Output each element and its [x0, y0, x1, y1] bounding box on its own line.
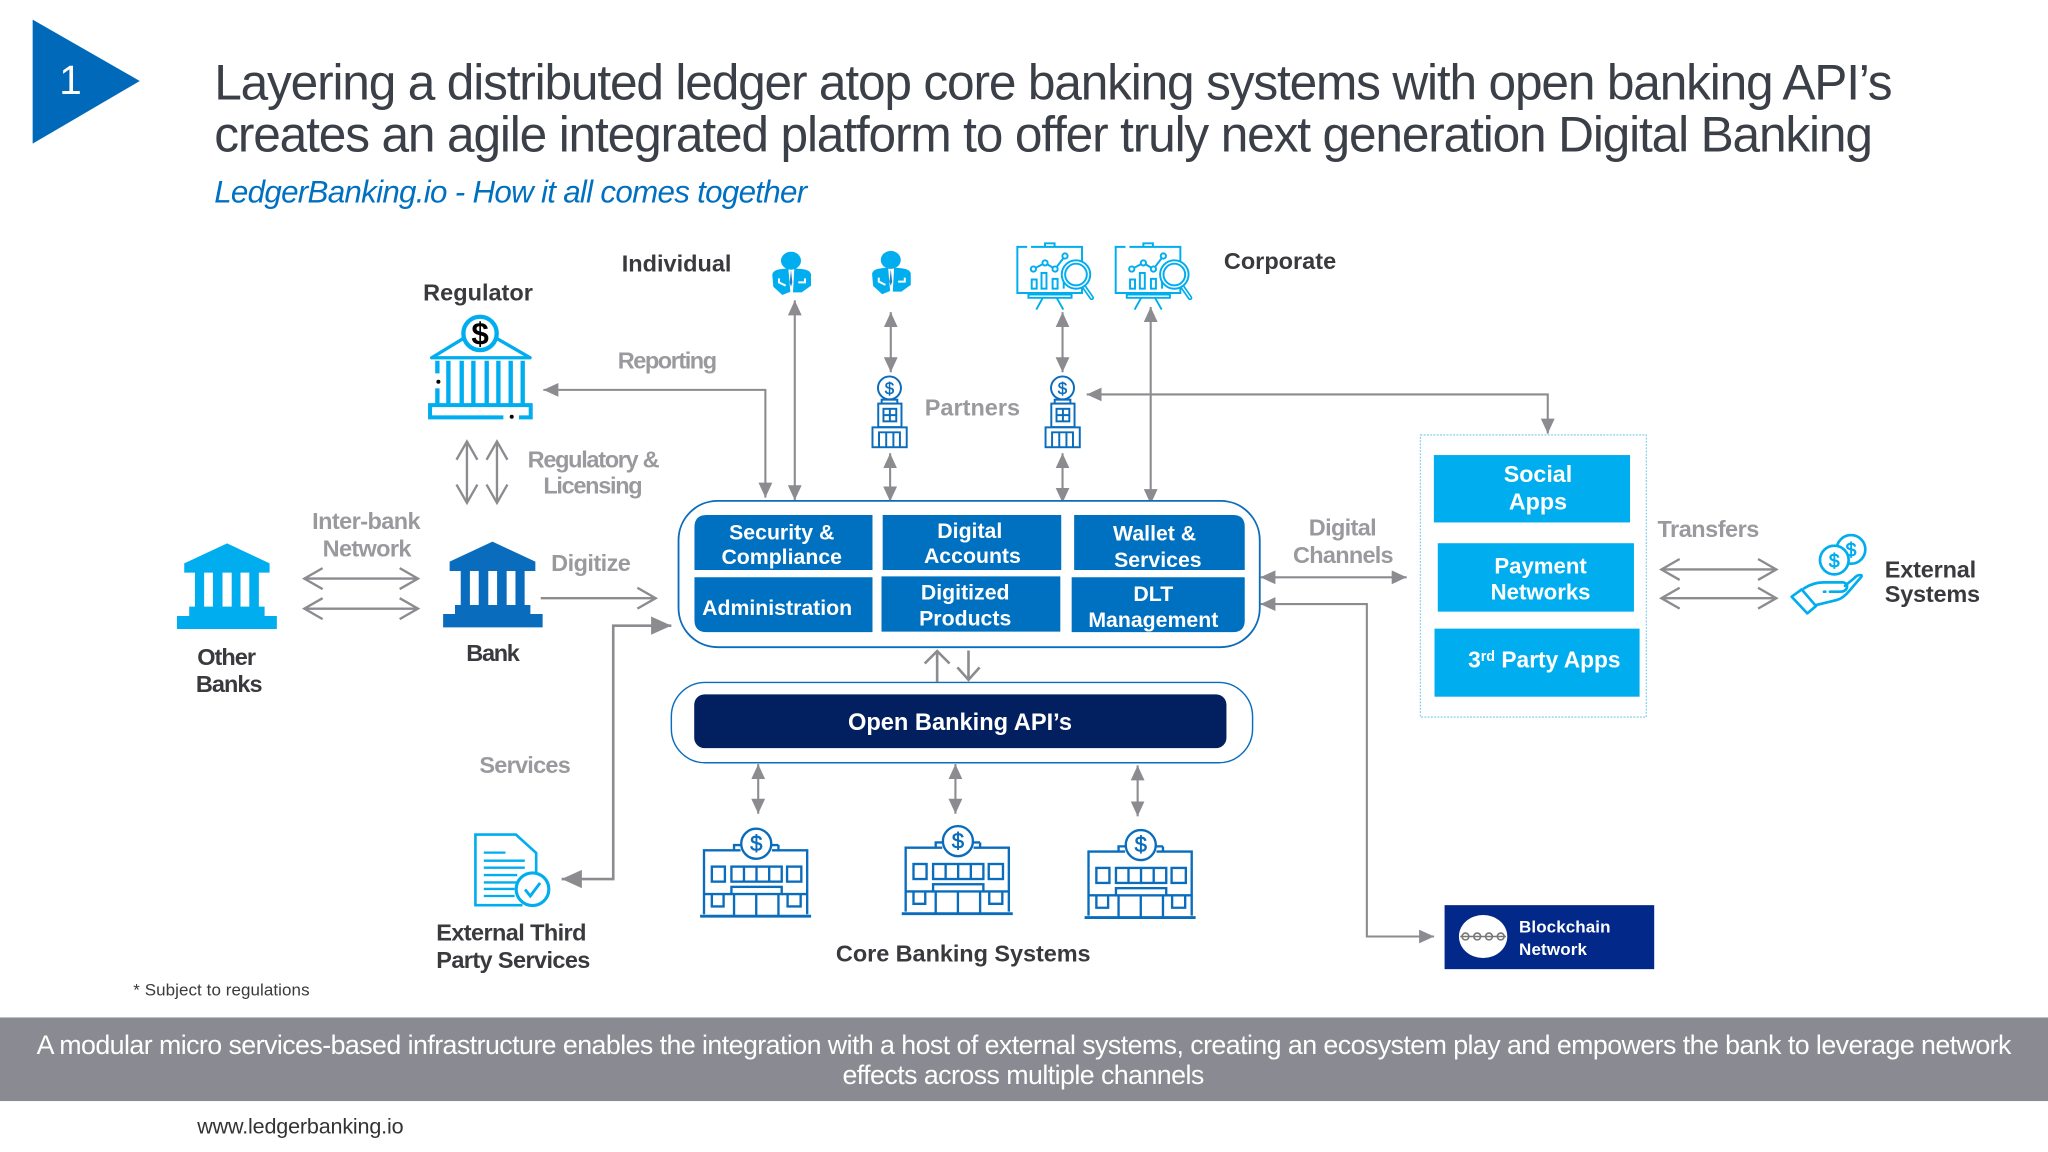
icon: corporate dashboard 2 [1116, 243, 1190, 310]
box: blockchain network: Blockchain [1519, 918, 1610, 937]
arrow: reporting [543, 390, 765, 498]
section number triangle [33, 20, 140, 144]
panel: open banking APIs: Open Banking API’s [848, 710, 1072, 736]
box: payment networks: Networks [1491, 580, 1591, 605]
box: blockchain network: Network [1519, 940, 1588, 959]
box: third party apps: Party Apps [1495, 646, 1621, 672]
label: inter-bank network: Inter-bank [312, 508, 421, 534]
panel: ledgerbanking platform [679, 501, 1260, 647]
icon: regulator building: $ [471, 317, 489, 352]
icon: partner bank 1 [872, 376, 907, 447]
cell: dlt management: DLT [1133, 582, 1173, 606]
arrow: digital channels [1260, 576, 1407, 578]
box: payment networks [1438, 543, 1634, 612]
cell: digitized products: Digitized [921, 581, 1010, 605]
label: external third party services: External Third [436, 919, 586, 945]
box: payment networks: Payment [1494, 553, 1587, 578]
label: external third party services: Party Services [436, 947, 590, 973]
icon: external systems hand with coins: $ [1846, 541, 1857, 562]
icon: core bank 2 [902, 826, 1013, 914]
box: third party apps: rd [1481, 649, 1495, 665]
subtitle: LedgerBanking.io - How it all comes together [214, 174, 809, 209]
box: blockchain network [1445, 905, 1654, 969]
cell: digitized products: Products [919, 607, 1011, 631]
arrows: platform to open banking [925, 650, 980, 682]
box: social apps: Apps [1509, 488, 1567, 514]
cell: wallet and services [1074, 515, 1245, 572]
arrow: core system 3 [1137, 765, 1139, 816]
arrow: services [562, 626, 671, 879]
icon: core bank 1 [700, 829, 811, 916]
arrow: corporate to partner [1062, 312, 1064, 372]
cell: administration [694, 577, 872, 632]
cell: digital accounts: Digital [937, 519, 1002, 543]
cell: security and compliance: Security & [729, 520, 834, 544]
arrow: partner to platform left [889, 453, 891, 502]
icon: individual customer 2 [872, 251, 911, 294]
label: individual: Individual [622, 251, 731, 277]
arrow: individual to partner [890, 312, 892, 372]
cell: digitized products [882, 576, 1060, 632]
label: other banks: Other [197, 644, 256, 670]
arrow: core system 2 [954, 764, 956, 814]
arrow: core system 1 [757, 764, 759, 814]
cell: digital accounts [883, 515, 1061, 570]
panel: external channels [1420, 435, 1646, 717]
label: external systems: Systems [1885, 581, 1980, 607]
icon: bank [443, 542, 543, 627]
label: core banking systems: Core Banking Systems [836, 940, 1091, 966]
cell: dlt management: Management [1088, 608, 1218, 632]
icon: individual customer 1 [772, 252, 811, 295]
arrows: inter-bank [304, 579, 418, 609]
arrow: digitize [541, 597, 656, 599]
label: transfers: Transfers [1657, 516, 1759, 542]
cell: wallet and services: Wallet & [1113, 522, 1196, 546]
title: Layering a distributed ledger atop core banking systems with open banking API’s [214, 54, 1893, 110]
label: regulatory and licensing: Regulatory & [528, 447, 660, 473]
label: digital channels: Channels [1293, 542, 1394, 568]
label: digital channels: Digital [1309, 515, 1377, 541]
cell: dlt management [1072, 577, 1245, 632]
label: external systems: External [1885, 556, 1976, 582]
icon: partner bank 2 [1046, 376, 1080, 447]
label: regulatory and licensing: Licensing [543, 473, 643, 499]
icon: regulator building [430, 317, 531, 419]
arrow: platform to blockchain [1260, 604, 1434, 936]
label: digitize: Digitize [551, 550, 631, 576]
arrow: corporate to platform [1150, 307, 1152, 504]
panel: open banking APIs [671, 682, 1253, 763]
icon: corporate dashboard 1 [1017, 243, 1092, 310]
arrow: individual to platform [794, 300, 796, 500]
banner: summary: A modular micro services-based infrastructure enables the integration with a host of external systems, creating an ecosystem play and empowers the bank to leverage network [37, 1030, 2012, 1060]
arrows: transfers [1661, 569, 1776, 598]
label: partners: Partners [925, 394, 1020, 420]
label: other banks: Banks [196, 671, 263, 697]
icon: external systems hand with coins [1792, 535, 1865, 613]
arrows: regulatory and licensing [467, 441, 497, 503]
cell: administration: Administration [702, 596, 852, 620]
box: third party apps: 3 [1468, 646, 1481, 672]
website url: www.ledgerbanking.io [196, 1114, 404, 1139]
icon: core bank 3 [1085, 830, 1196, 918]
cell: security and compliance: Compliance [721, 545, 842, 569]
title: creates an agile integrated platform to offer truly next generation Digital Banking [214, 107, 1873, 163]
box: social apps: Social [1504, 461, 1572, 487]
label: bank: Bank [466, 640, 521, 666]
label: corporate: Corporate [1224, 248, 1336, 274]
banner: summary: effects across multiple channels [842, 1060, 1204, 1090]
box: social apps [1434, 455, 1630, 522]
cell: wallet and services: Services [1114, 548, 1202, 572]
icon: external third party document [475, 835, 549, 906]
banner: summary [0, 1017, 2048, 1101]
icon: external systems hand with coins: $ [1829, 551, 1840, 572]
footnote: * Subject to regulations [133, 980, 310, 999]
label: regulator: Regulator [423, 279, 533, 305]
label: inter-bank network: Network [323, 535, 412, 561]
arrow: partner to external apps [1087, 394, 1548, 434]
box: third party apps [1435, 629, 1640, 697]
icon: other banks [177, 543, 277, 629]
cell: security and compliance [694, 515, 872, 570]
label: services: Services [479, 752, 571, 778]
section number triangle: 1 [59, 57, 82, 103]
label: reporting: Reporting [618, 347, 717, 373]
cell: digital accounts: Accounts [924, 544, 1021, 568]
arrow: partner to platform right [1062, 453, 1064, 503]
